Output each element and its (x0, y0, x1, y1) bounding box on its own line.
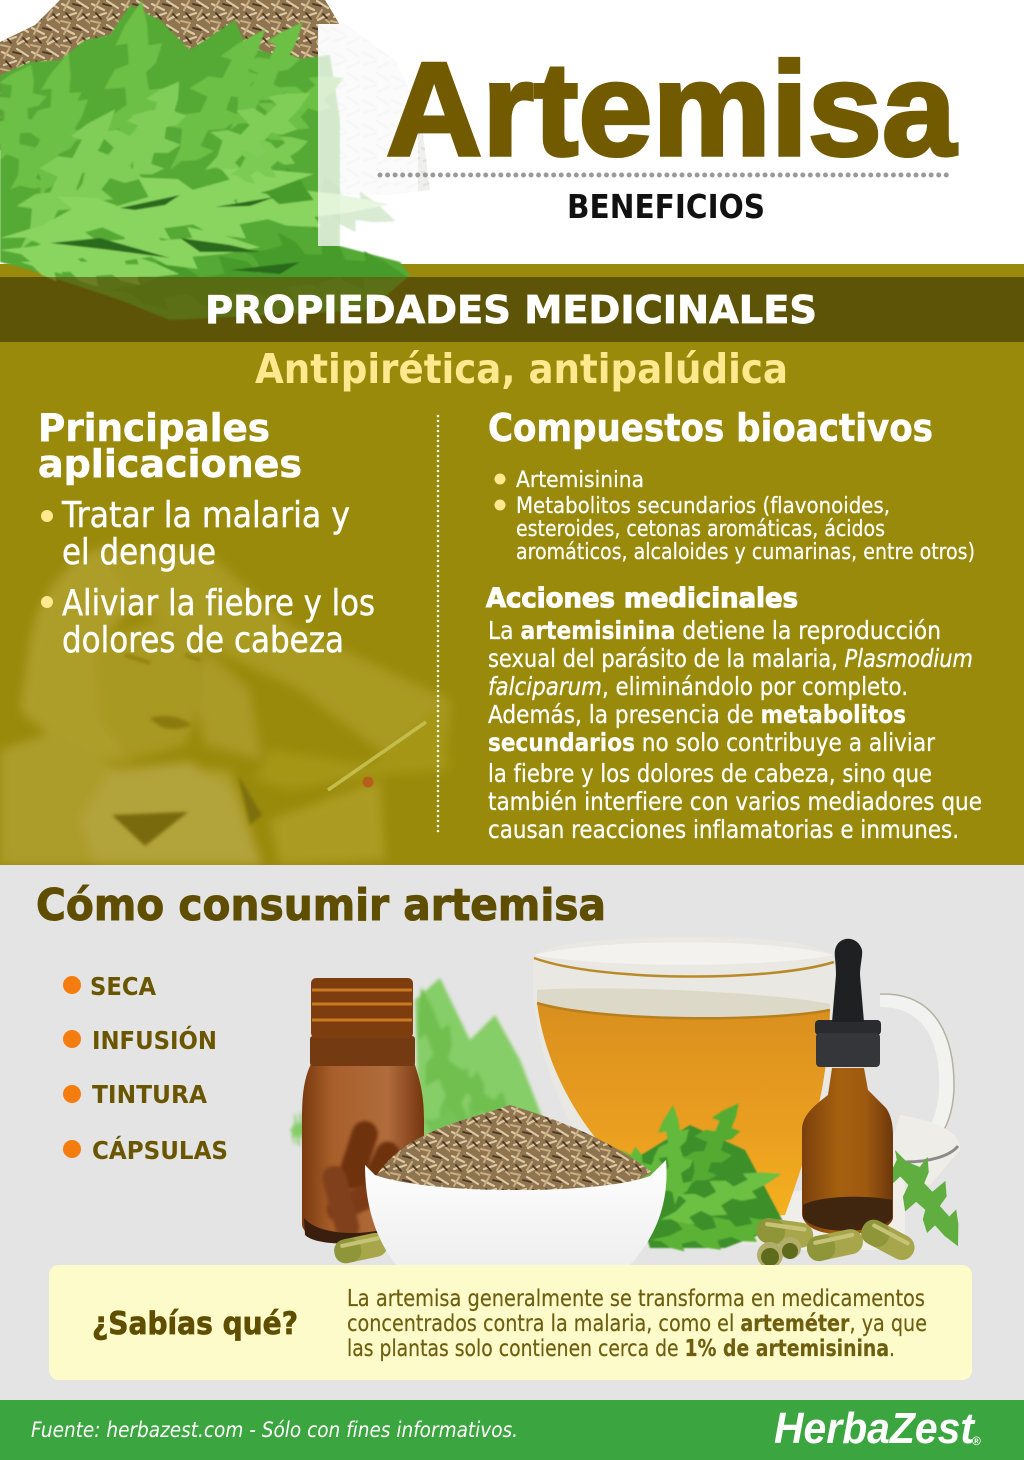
section background: gray consumption panel (0, 865, 1024, 1400)
bullet list: applications: Aliviar la fiebre y los (62, 583, 375, 624)
subheading: antipirética: Antipirética, antipalúdica (255, 345, 788, 393)
bullet list: compounds (494, 467, 975, 565)
bullet list: compounds: Metabolitos secundarios (flavonoides, (516, 493, 890, 519)
registered mark: ® (972, 1434, 981, 1448)
photo: amber capsule bottle (302, 978, 424, 1244)
dotted divider under title (380, 172, 952, 178)
text block: medicinal actions (488, 616, 982, 844)
text block: medicinal actions: la fiebre y los dolores de cabeza, sino que (488, 759, 932, 788)
heading: principales aplicaciones: Principales (38, 406, 270, 450)
callout text (347, 1286, 927, 1362)
text block: medicinal actions: La artemisinina detiene la reproducción (488, 616, 941, 645)
callout text: concentrados contra la malaria, como el arteméter, ya que (347, 1311, 927, 1337)
photo: glass tea cup (533, 937, 960, 1250)
bullet list: compounds: esteroides, cetonas aromáticas, ácidos (516, 516, 885, 542)
bullet list: applications: Tratar la malaria y (61, 495, 350, 536)
callout text: La artemisa generalmente se transforma en medicamentos (347, 1286, 925, 1312)
photo: amber dropper bottle (802, 939, 893, 1234)
list: consumption forms: INFUSIÓN (92, 1025, 217, 1055)
bullet list: applications: el dengue (62, 532, 216, 573)
subtitle: BENEFICIOS (567, 187, 765, 226)
list: consumption forms (63, 972, 228, 1165)
list: consumption forms: TINTURA (92, 1080, 208, 1109)
list: consumption forms: CÁPSULAS (92, 1136, 228, 1165)
logo: HerbaZest: HerbaZest (774, 1404, 976, 1453)
heading: principales aplicaciones: aplicaciones (38, 442, 302, 486)
panel: compuestos bioactivos (488, 406, 975, 565)
saucer (880, 1115, 960, 1185)
title: Artemisa (386, 36, 957, 184)
callout: did you know (49, 1265, 972, 1380)
photo: small leaf behind dropper bottle (875, 1136, 978, 1260)
dark band overlay on photo (0, 277, 1024, 342)
dark heading band base (0, 277, 1024, 342)
photo: green herb sprig (598, 1093, 791, 1256)
photo: capsule left (332, 1231, 390, 1265)
callout heading: ¿Sabías qué? (92, 1306, 298, 1342)
list: consumption forms: SECA (90, 972, 157, 1001)
heading: cómo consumir artemisa: Cómo consumir artemisa (36, 880, 606, 931)
heading: compuestos bioactivos: Compuestos bioactivos (488, 406, 933, 450)
photo: white bowl with dried herb (365, 1105, 667, 1290)
text block: medicinal actions: causan reacciones inflamatorias e inmunes. (488, 815, 959, 844)
text block: medicinal actions: falciparum, eliminándolo por completo. (488, 672, 908, 701)
photo: leaves behind bottle (290, 978, 555, 1166)
text block: medicinal actions: Además, la presencia de metabolitos (488, 700, 906, 729)
bullet list: applications (41, 495, 375, 661)
section background: olive panel (0, 264, 1024, 865)
panel: acciones medicinales (486, 583, 982, 844)
illustration: woman with fever and thermometer (0, 545, 450, 865)
heading: principales aplicaciones (38, 406, 302, 486)
heading: acciones medicinales: Acciones medicinales (486, 583, 798, 614)
footer (0, 1400, 1024, 1460)
photo: artemisa leaves and dried herb (0, 0, 430, 320)
bullet list: compounds: Artemisinina (516, 467, 644, 493)
bullet list: applications: dolores de cabeza (62, 620, 344, 661)
heading: propiedades medicinales: PROPIEDADES MEDICINALES (205, 288, 817, 332)
photo: capsules right (755, 1216, 919, 1268)
text block: medicinal actions: secundarios no solo contribuye a aliviar (488, 728, 936, 757)
cup body and tea (533, 937, 835, 1245)
panel: principales aplicaciones (38, 406, 375, 661)
callout text: las plantas solo contienen cerca de 1% de artemisinina. (347, 1336, 895, 1362)
source line: Fuente: herbazest.com - Sólo con fines informativos. (31, 1418, 518, 1442)
text block: medicinal actions: sexual del parásito de la malaria, Plasmodium (488, 644, 973, 673)
cup handle (880, 1000, 946, 1170)
